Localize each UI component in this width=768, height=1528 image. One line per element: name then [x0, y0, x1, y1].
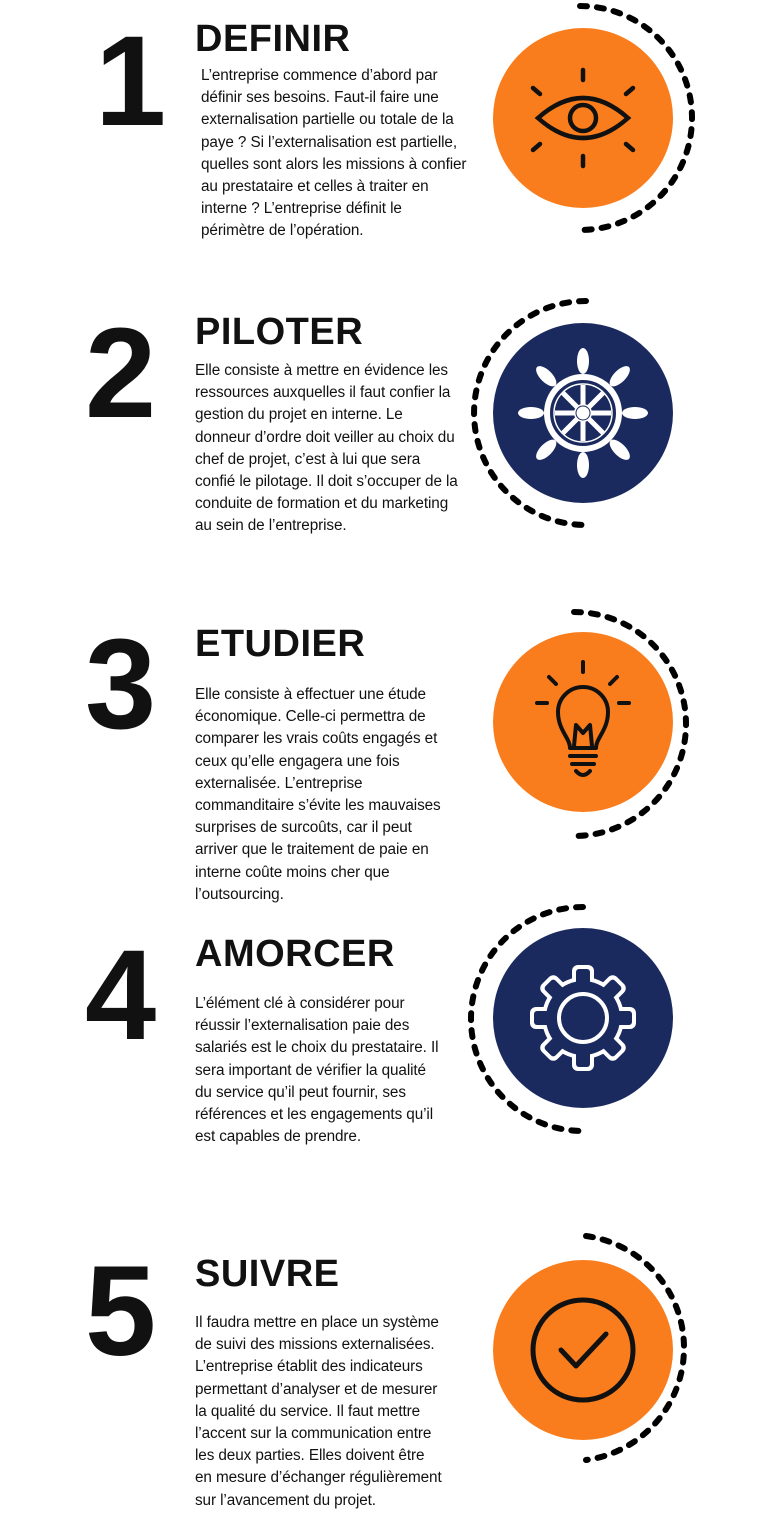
- heading: piloter: PILOTER: [195, 311, 363, 353]
- text: amorcer: est capables de prendre.: [195, 1128, 361, 1145]
- text: suivre: sur l’avancement du projet.: [195, 1492, 376, 1509]
- text: piloter: [195, 362, 458, 534]
- text: amorcer: du service qu’il peut fournir, ses: [195, 1084, 406, 1101]
- heading: amorcer: AMORCER: [195, 933, 395, 975]
- text: piloter: confié le pilotage. Il doit s’occuper de la: [195, 473, 458, 490]
- text: suivre: la qualité du service. Il faut mettre: [195, 1403, 420, 1420]
- heading: etudier: ETUDIER: [195, 623, 365, 665]
- number 1: 1: [95, 10, 162, 153]
- text: definir: définir ses besoins. Faut-il faire une: [201, 89, 439, 106]
- text: piloter: donneur d’ordre doit veiller au choix du: [195, 429, 455, 446]
- text: piloter: chef de projet, c’est à lui que sera: [195, 451, 420, 468]
- text: definir: périmètre de l’opération.: [201, 222, 363, 239]
- text: suivre: l’accent sur la communication entre: [195, 1425, 431, 1442]
- text: suivre: L’entreprise établit des indicateurs: [195, 1358, 423, 1375]
- text: piloter: conduite de formation et du marketing: [195, 495, 448, 512]
- text: piloter: ressources auxquelles il faut confier la: [195, 384, 450, 401]
- icon: ship wheel: [474, 301, 673, 525]
- text: piloter: Elle consiste à mettre en évidence les: [195, 362, 448, 379]
- heading: definir: DEFINIR: [195, 18, 350, 60]
- text: definir: quelles sont alors les missions à confier: [201, 156, 466, 173]
- text: definir: paye ? Si l’externalisation est partielle,: [201, 134, 457, 151]
- number 3: 3: [85, 613, 152, 756]
- text: amorcer: salariés est le choix du prestataire. Il: [195, 1039, 438, 1056]
- text: etudier: externalisée. L’entreprise: [195, 775, 362, 792]
- text: definir: [201, 67, 466, 239]
- text: suivre: de suivi des missions externalisées.: [195, 1336, 435, 1353]
- number 4: 4: [85, 924, 152, 1067]
- text: suivre: en mesure d’échanger régulièrement: [195, 1469, 442, 1486]
- text: etudier: [195, 686, 441, 903]
- heading: suivre: SUIVRE: [195, 1253, 339, 1295]
- text: etudier: l’outsourcing.: [195, 886, 284, 903]
- text: suivre: permettant d’analyser et de mesurer: [195, 1381, 437, 1398]
- text: etudier: économique. Celle-ci permettra de: [195, 708, 426, 725]
- text: piloter: gestion du projet en interne. Le: [195, 406, 403, 423]
- text: etudier: interne coûte moins cher que: [195, 864, 389, 881]
- text: definir: au prestataire et celles à traiter en: [201, 178, 429, 195]
- text: piloter: au sein de l’entreprise.: [195, 517, 347, 534]
- text: etudier: Elle consiste à effectuer une étude: [195, 686, 426, 703]
- text: etudier: comparer les vrais coûts engagés et: [195, 730, 437, 747]
- text: suivre: [195, 1314, 442, 1509]
- text: suivre: les deux parties. Elles doivent être: [195, 1447, 424, 1464]
- text: definir: L’entreprise commence d’abord par: [201, 67, 437, 84]
- icon: gear: [471, 907, 673, 1131]
- icon: check: [493, 1236, 684, 1460]
- text: etudier: surprises de surcoûts, car il peut: [195, 819, 412, 836]
- text: amorcer: références et les engagements qu’il: [195, 1106, 433, 1123]
- icon: lightbulb: [493, 612, 686, 836]
- number 2: 2: [85, 302, 152, 445]
- text: amorcer: sera important de vérifier la qualité: [195, 1062, 426, 1079]
- number 5: 5: [85, 1240, 152, 1383]
- text: etudier: commanditaire s’évite les mauvaises: [195, 797, 441, 814]
- text: amorcer: [195, 995, 438, 1145]
- text: definir: interne ? L’entreprise définit le: [201, 200, 402, 217]
- text: definir: externalisation partielle ou totale de la: [201, 111, 454, 128]
- text: amorcer: réussir l’externalisation paie des: [195, 1017, 409, 1034]
- text: suivre: Il faudra mettre en place un système: [195, 1314, 439, 1331]
- text: amorcer: L’élément clé à considérer pour: [195, 995, 404, 1012]
- text: etudier: ceux qu’elle engagera une fois: [195, 753, 400, 770]
- text: etudier: arriver que le traitement de paie en: [195, 841, 429, 858]
- icon: eye: [493, 6, 692, 230]
